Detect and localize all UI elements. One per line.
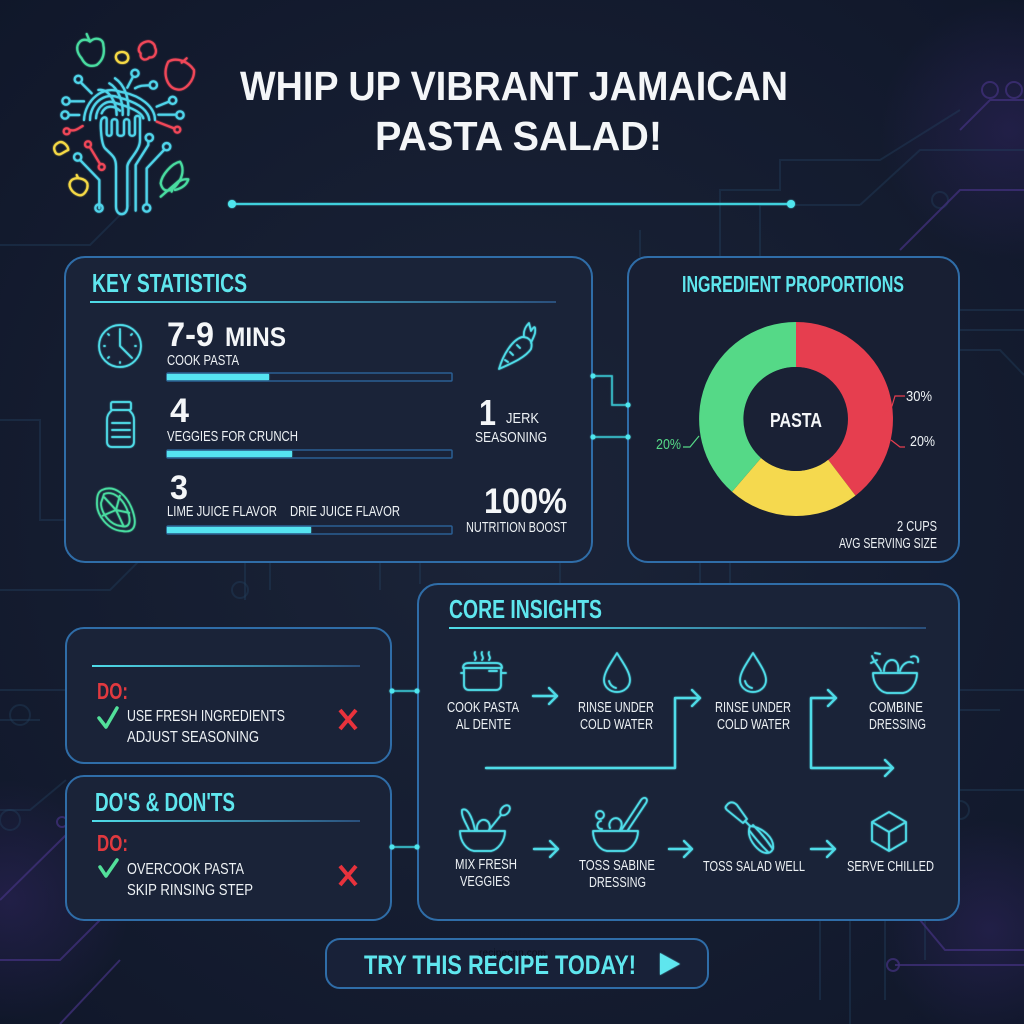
stat: cook time: [167, 316, 452, 381]
icon: cube: [872, 812, 906, 851]
step: toss dressing: TOSS SABINE: [579, 857, 655, 874]
step: combine: DRESSING: [869, 716, 926, 733]
list: don't items: [127, 861, 253, 899]
arrow: [811, 841, 835, 857]
list: do items: USE FRESH INGREDIENTS: [127, 708, 285, 725]
call to action button: TRY THIS RECIPE TODAY!: [364, 950, 636, 980]
stat: nutrition boost: 100%: [484, 482, 567, 521]
step: rinse: [578, 699, 654, 733]
step: serve chilled: SERVE CHILLED: [847, 858, 934, 875]
label: 20% left: 20%: [656, 436, 681, 453]
heading: core insights: CORE INSIGHTS: [449, 594, 602, 624]
step: toss dressing: [579, 857, 655, 891]
list: don't items: SKIP RINSING STEP: [127, 882, 253, 899]
step: toss dressing: DRESSING: [589, 874, 646, 891]
icon: cross: [340, 866, 356, 885]
stat: jerk seasoning: SEASONING: [475, 429, 547, 446]
stat: lime juice: DRIE JUICE FLAVOR: [290, 503, 400, 520]
step: rinse: RINSE UNDER: [715, 699, 791, 716]
label: 20% right: [891, 433, 935, 450]
label: 30%: 30%: [906, 388, 932, 405]
icon: salad bowl: [871, 653, 918, 693]
icon: tossing bowl: [593, 798, 647, 851]
step: mix veggies: [455, 856, 517, 890]
connectors: do's to insights: [390, 688, 420, 850]
step: rinse: COLD WATER: [717, 716, 790, 733]
label: do: DO:: [97, 678, 128, 704]
stat: jerk seasoning: [475, 392, 547, 446]
label: 20% right: 20%: [910, 433, 935, 450]
logo: fork with fingerprint and vegetables: [54, 34, 194, 214]
icon: check: [100, 860, 117, 876]
watermark: recipecan.com: [479, 948, 546, 959]
heading: key statistics: KEY STATISTICS: [92, 268, 247, 298]
heading: ingredient proportions: INGREDIENT PROPORTIONS: [682, 271, 904, 297]
icon: check: [99, 708, 117, 727]
connectors: statistics to proportions: [590, 374, 630, 440]
serving size note: 2 CUPS: [897, 518, 937, 535]
stat: veggies: [167, 392, 452, 458]
panel: do's: [66, 628, 391, 763]
list: do items: [127, 708, 285, 746]
icon: jar: [107, 402, 134, 447]
arrow: elbow branch: [811, 690, 893, 776]
stat: jerk seasoning: 1: [479, 392, 496, 433]
step: cook pasta: [447, 699, 519, 733]
step: cook pasta: AL DENTE: [456, 716, 511, 733]
title divider line: [228, 200, 795, 208]
arrow: elbow to second rinse: [486, 690, 700, 768]
icon: whisk: [726, 802, 773, 853]
panel: key statistics: [65, 257, 592, 562]
title: PASTA SALAD!: [375, 113, 662, 159]
stat: lime juice: LIME JUICE FLAVOR: [167, 503, 277, 520]
step: rinse: COLD WATER: [580, 716, 653, 733]
stat: cook time: 7-9: [167, 316, 214, 354]
icon: lime: [97, 488, 135, 531]
icon: play triangle: [660, 953, 680, 975]
icon: water drop: [740, 653, 766, 692]
step: mix veggies: VEGGIES: [460, 873, 510, 890]
arrow: [533, 688, 557, 704]
donut chart: [699, 322, 893, 516]
panel: ingredient proportions: [628, 257, 959, 562]
list: do items: ADJUST SEASONING: [127, 729, 259, 746]
heading: do's and don'ts: DO'S & DON'TS: [95, 787, 235, 817]
donut chart: PASTA: [770, 410, 822, 432]
arrow: [534, 841, 558, 857]
title: WHIP UP VIBRANT JAMAICAN: [240, 63, 788, 109]
stat: veggies: 4: [170, 392, 189, 430]
step: rinse: [715, 699, 791, 733]
stat: cook time: COOK PASTA: [167, 352, 239, 369]
stat: cook time: MINS: [225, 322, 286, 352]
serving size note: AVG SERVING SIZE: [839, 535, 937, 552]
arrow: [669, 841, 692, 857]
stat: jerk seasoning: JERK: [506, 410, 539, 427]
title: [240, 63, 788, 159]
icon: cross: [340, 710, 356, 729]
step: cook pasta: COOK PASTA: [447, 699, 519, 716]
panel: core insights: [418, 584, 959, 920]
stat: nutrition boost: [466, 482, 567, 536]
label: 20% left: [656, 436, 699, 453]
step: mix veggies: MIX FRESH: [455, 856, 517, 873]
list: don't items: OVERCOOK PASTA: [127, 861, 244, 878]
label: do: DO:: [97, 830, 128, 856]
label: 30%: [878, 388, 932, 417]
step: rinse: RINSE UNDER: [578, 699, 654, 716]
call to action button: [326, 939, 708, 988]
icon: pot: [461, 652, 506, 690]
icon: clock: [99, 325, 141, 367]
icon: water drop: [604, 653, 630, 692]
serving size note: [839, 518, 937, 552]
stat: lime juice: 3: [170, 469, 188, 507]
step: toss salad: TOSS SALAD WELL: [703, 858, 805, 875]
stat: lime juice: [167, 469, 452, 534]
panel: do's and don'ts: [66, 776, 391, 920]
step: combine: COMBINE: [869, 699, 923, 716]
icon: carrot: [499, 323, 535, 369]
stat: nutrition boost: NUTRITION BOOST: [466, 519, 567, 536]
icon: mixing bowl: [460, 805, 510, 851]
stat: veggies: VEGGIES FOR CRUNCH: [167, 428, 298, 445]
step: combine: [869, 699, 926, 733]
